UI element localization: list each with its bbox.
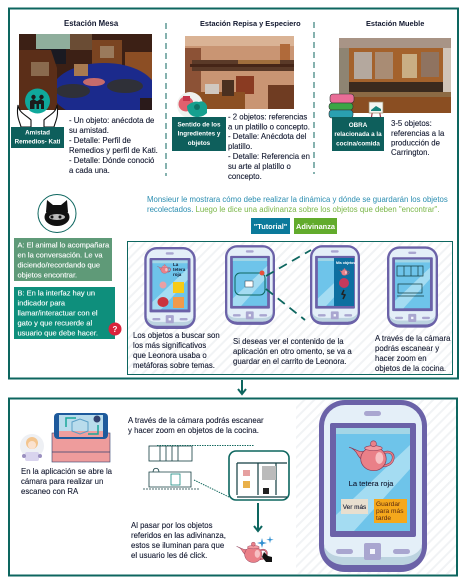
text: camera scan: y hacer zoom en objetos de la cocina.: [128, 426, 259, 435]
panel: lower frame: [9, 398, 457, 576]
label: Amistad: [11, 127, 64, 148]
text: camera opens: En la aplicación se abre la: [21, 467, 113, 476]
text: Repisa details: - Detalle: Referencia en: [228, 152, 310, 161]
text: step 2: aplicación en otro omento, se va a: [233, 347, 352, 356]
icon: books: [329, 94, 354, 118]
phone 3: my objects: Mis objetos: [336, 261, 355, 265]
callout B: llamar/interactuar con el: [18, 308, 98, 318]
label: Sentido de los Ingredientes y objetos: Ingredientes y: [178, 130, 221, 138]
panel: tutorial steps: [128, 242, 452, 374]
button: Ver más: Ver más: [343, 504, 366, 511]
label: Sentido de los Ingredientes y objetos: objetos: [188, 140, 211, 147]
text: Mueble details: producción de: [391, 138, 440, 148]
text: Mueble details: 3-5 objetos:: [391, 119, 432, 128]
text: Mesa details: a cada una.: [69, 166, 110, 175]
text: Repisa details: a un platillo o concepto.: [228, 122, 310, 132]
text: Mueble details: referencias a la: [391, 129, 445, 138]
callout B: gato y que recuerde al: [18, 318, 92, 328]
text: tutorial intro: Monsieur le mostrara cómo debe realizar la dinámica y dónde se guardarán los objetos: [147, 195, 448, 204]
icon: AR phone on box: [52, 413, 110, 462]
heading: Estación Mesa: Estación Mesa: [64, 19, 119, 28]
icon: question mark: [108, 322, 122, 336]
text: Repisa details: - Detalle: Anécdota del: [228, 132, 307, 141]
icon: cat: [38, 194, 76, 232]
callout B: usuario que debe hacer.: [18, 328, 98, 338]
arrow: to teapot: [254, 503, 262, 531]
text: step 3: podrás escanear y: [375, 344, 439, 353]
phone 3: my objects: [310, 245, 360, 325]
text: step 3: A través de la cámara: [375, 334, 451, 343]
connectors: dotted zoom lines: [157, 446, 254, 497]
text: objects light up: Al pasar por los objetos: [131, 521, 213, 530]
arrow: to lower panel: [238, 380, 246, 394]
label: Sentido de los Ingredientes y objetos: Sentido de los: [177, 122, 221, 128]
text: camera opens: escaneo con RA: [21, 487, 79, 496]
label: OBRA: [332, 117, 384, 151]
text: camera opens: cámara para realizar un: [21, 477, 103, 486]
text: objects light up: estos se iluminan para que: [131, 541, 224, 550]
callout A: [14, 238, 112, 281]
big phone: teapot screen: La tetera roja: [349, 479, 394, 488]
button: Guardar para más tarde: Guardar: [376, 501, 401, 508]
text: Mesa details: Remedios y perfil de Kati.: [69, 146, 158, 155]
photo: kitchen cabinet: [339, 38, 451, 113]
button: Adivinanza: Adivinanza: [296, 222, 336, 231]
text: step 1: que Leonora usaba o: [133, 351, 207, 360]
big phone: teapot screen: [319, 400, 427, 572]
callout B: [14, 287, 115, 339]
illustration: kitchen line drawing: [143, 446, 199, 489]
text: Mueble details: Carrington.: [391, 148, 430, 157]
phone 2: save to cart: [225, 245, 275, 325]
text: step 2: Si deseas ver el contenido de la: [233, 337, 344, 346]
text: objects light up: el usuario les dé click.: [131, 551, 207, 560]
photo: dining table: [19, 34, 152, 110]
callout A: diciendo/recordando que: [18, 260, 100, 270]
button: Guardar para más tarde: [374, 499, 407, 523]
button: Adivinanza: [294, 218, 337, 234]
text: step 3: hacer zoom en: [375, 354, 427, 363]
text: step 1: metáforas sobre temas.: [133, 361, 215, 370]
button: Tutorial: "Tutorial": [254, 222, 288, 231]
icon: girl with laptop: [20, 434, 44, 461]
text: tutorial intro: Luego le dice una adivinanza sobre los objetos que deben "encontrar".: [196, 205, 440, 214]
label: OBRA: OBRA: [349, 122, 368, 129]
text: Repisa details: platillo.: [228, 142, 252, 151]
callout: magnified kitchen: [229, 451, 289, 500]
phone 1: objects to find: tetera: [173, 267, 186, 272]
text: objects light up: referidos en las adivinanza,: [131, 531, 226, 540]
button: Tutorial: [251, 218, 290, 234]
phone 1: objects to find: La: [173, 262, 179, 267]
text: step 1: Los objetos a buscar son: [133, 331, 220, 340]
icon: ingredients: [177, 92, 207, 118]
icon: question mark: ?: [113, 325, 118, 334]
label: OBRA: relacionada a la: [334, 131, 382, 138]
callout A: en la conversación. Le va: [18, 250, 103, 260]
button: Guardar para más tarde: tarde: [376, 515, 391, 522]
label: OBRA: cocina/comida: [336, 140, 380, 148]
text: step 3: objetos de la cocina.: [375, 364, 446, 373]
label: Amistad: Remedios- Kati: [15, 138, 61, 146]
photo: shelf and spices: [185, 36, 294, 109]
background: stripes behind big phone: [296, 400, 456, 574]
icon: easel: [369, 102, 383, 120]
text: camera scan: A través de la cámara podrás escanear: [128, 416, 264, 425]
text: step 1: los más significativos: [133, 341, 206, 350]
callout A: A: El animal lo acompañara: [18, 240, 110, 250]
text: Repisa details: concepto.: [228, 172, 262, 181]
text: step 2: guardar en el carrito de Leonora.: [233, 357, 347, 366]
label: Sentido de los Ingredientes y objetos: [172, 117, 226, 151]
button: Ver más: [341, 499, 368, 514]
label: Amistad: Amistad: [25, 130, 50, 136]
phone 1: objects to find: [144, 247, 196, 329]
callout B: indicador para: [18, 298, 66, 308]
text: Repisa details: su arte al platillo o: [228, 162, 292, 171]
text: tutorial intro: recolectados.: [147, 205, 196, 214]
text: Repisa details: - 2 objetos: referencias: [228, 112, 307, 122]
button: Guardar para más tarde: para más: [376, 508, 404, 515]
connectors: dashed lines to phone 3: [266, 250, 311, 320]
text: Mesa details: - Detalle: Dónde conoció: [69, 156, 155, 165]
text: Mesa details: - Detalle: Perfil de: [69, 136, 131, 145]
callout A: objetos encontrar.: [18, 270, 77, 280]
panel: upper frame: [9, 8, 458, 378]
heading: Estación Repisa y Especiero: Estación Repisa y Especiero: [200, 19, 301, 28]
heading: Estación Mueble: Estación Mueble: [366, 19, 424, 28]
text: Mesa details: - Un objeto: anécdota de: [69, 116, 154, 125]
phone 4: camera: [387, 246, 438, 328]
icon: teapot with click: [237, 536, 274, 562]
text: Mesa details: su amistad.: [69, 126, 109, 135]
icon: friendship hands: [17, 88, 58, 127]
phone 1: objects to find: roja: [173, 272, 182, 277]
callout B: B: En la interfaz hay un: [18, 288, 95, 298]
